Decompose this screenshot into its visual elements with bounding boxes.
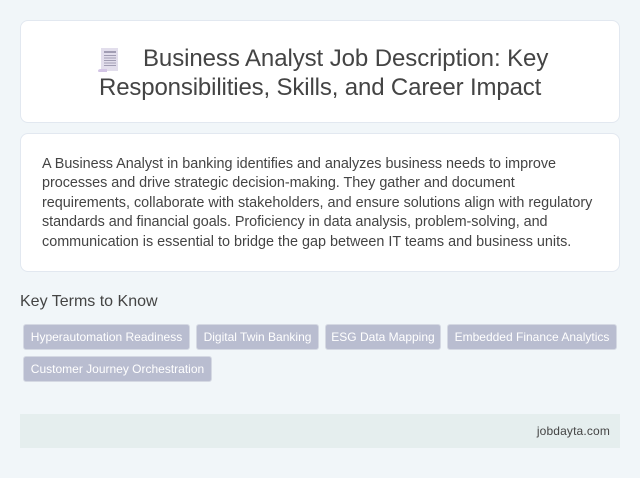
heading: key terms: Key Terms to Know — [20, 293, 158, 310]
footer: source: jobdayta.com — [537, 424, 610, 438]
tag: embedded finance analytics — [447, 324, 617, 350]
heading: title: Responsibilities, Skills, and Career Impact — [99, 74, 541, 101]
tag: esg data mapping: ESG Data Mapping — [331, 330, 435, 344]
text block: description: communication is essential to bridge the gap between IT teams and business units. — [42, 234, 571, 250]
text block: description: processes and drive strategic decision-making. They gather and document — [42, 175, 515, 191]
panel: description card — [20, 133, 620, 272]
icon: document receipt — [98, 48, 118, 72]
text block: description — [42, 156, 592, 250]
tag: esg data mapping — [325, 324, 441, 350]
tag: digital twin banking: Digital Twin Banking — [204, 330, 311, 344]
tag: hyperautomation readiness: Hyperautomation Readiness — [31, 330, 182, 344]
tag: hyperautomation readiness — [23, 324, 190, 350]
text block: description: standards and financial goals. Proficiency in data analysis, problem-solving, and — [42, 214, 548, 230]
tag: digital twin banking — [196, 324, 319, 350]
tag: customer journey orchestration — [23, 356, 212, 382]
text block: description: A Business Analyst in banking identifies and analyzes business needs to improve — [42, 156, 556, 172]
heading: title: Business Analyst Job Description: Key — [143, 45, 548, 72]
tag: embedded finance analytics: Embedded Finance Analytics — [455, 330, 609, 344]
text block: description: requirements, collaborate with stakeholders, and ensure solutions align with regulatory — [42, 195, 592, 211]
heading: title — [99, 45, 548, 101]
panel: title card — [20, 20, 620, 123]
footer bar — [20, 414, 620, 448]
tag: customer journey orchestration: Customer Journey Orchestration — [31, 362, 204, 376]
